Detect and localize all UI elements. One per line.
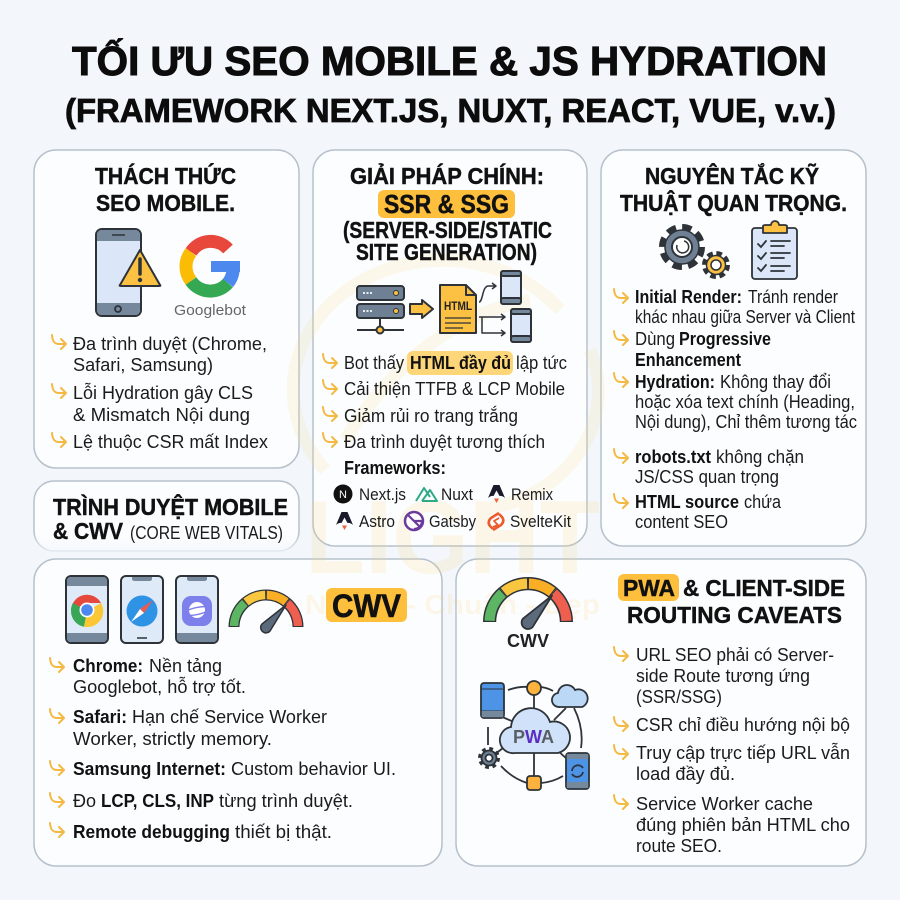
list: PWA: load đầy đủ.: [636, 764, 735, 784]
list: thách thức: Lỗi Hydration gây CLS: [73, 382, 253, 403]
list: PWA: Truy cập trực tiếp URL vẫn: [636, 742, 850, 763]
list: thách thức: & Mismatch Nội dung: [73, 405, 250, 425]
list: nguyên tắc: Progressive: [679, 329, 771, 349]
logo: astro: Astro: [359, 512, 395, 531]
title: TỐI ƯU SEO MOBILE & JS HYDRATION: [72, 38, 827, 84]
logo: nuxt: Nuxt: [441, 485, 473, 504]
heading: nguyên tắc: THUẬT QUAN TRỌNG.: [620, 189, 847, 216]
icon: gauge with CWV label: CWV: [507, 631, 549, 651]
list: browsers: [50, 656, 396, 842]
list: nguyên tắc: Tránh render: [748, 287, 838, 307]
heading: giải pháp: SSR & SSG: [384, 189, 509, 219]
panel fade: trình duyệt card bottom: [30, 534, 303, 554]
list: nguyên tắc: [614, 287, 857, 532]
list: nguyên tắc: Nội dung), Chỉ thêm tương tác: [635, 412, 857, 432]
panel: PWA card: [456, 559, 866, 866]
list: browsers: LCP, CLS, INP: [101, 791, 214, 811]
list: browsers: từng trình duyệt.: [219, 791, 353, 811]
list: browsers: Custom behavior UI.: [231, 759, 396, 779]
list: browsers: Nền tảng: [149, 656, 222, 676]
icon: google G: [186, 241, 240, 291]
heading: PWA: [618, 574, 845, 628]
googlebot label: Googlebot: [174, 302, 247, 319]
title: (FRAMEWORK NEXT.JS, NUXT, REACT, VUE, v.v.): [65, 92, 836, 129]
panel: browsers card: [34, 559, 442, 866]
list: giải pháp: Giảm rủi ro trang trắng: [344, 405, 518, 426]
list: browsers: Chrome:: [73, 656, 143, 676]
heading: thách thức: [95, 162, 236, 216]
list: giải pháp: HTML đầy đủ: [410, 353, 511, 373]
heading: trình duyệt mobile: [53, 493, 288, 544]
logo: nuxt: [416, 485, 473, 504]
list: nguyên tắc: JS/CSS quan trọng: [635, 467, 779, 487]
list: PWA: side Route tương ứng: [636, 666, 810, 686]
list: browsers: Worker, strictly memory.: [73, 729, 272, 749]
icon: safari phone: [121, 576, 163, 643]
icon: PWA network: [480, 681, 589, 790]
logo: sveltekit: [489, 512, 571, 531]
heading: giải pháp: SITE GENERATION): [356, 239, 537, 265]
title: [65, 38, 836, 129]
list: browsers: Googlebot, hỗ trợ tốt.: [73, 676, 246, 697]
list: nguyên tắc: Không thay đổi: [720, 372, 831, 392]
framework logos: [334, 484, 571, 531]
list: browsers: Remote debugging: [73, 822, 230, 842]
list: nguyên tắc: chứa: [744, 492, 782, 512]
heading: giải pháp: (SERVER-SIDE/STATIC: [343, 217, 552, 243]
heading: trình duyệt mobile: TRÌNH DUYỆT MOBILE: [53, 493, 288, 520]
heading: nguyên tắc: NGUYÊN TẮC KỸ: [645, 162, 819, 189]
list: nguyên tắc: Dùng: [635, 329, 675, 349]
heading: trình duyệt mobile: & CWV: [53, 518, 124, 544]
list: giải pháp: Đa trình duyệt tương thích: [344, 432, 545, 452]
heading: PWA: ROUTING CAVEATS: [627, 602, 842, 628]
list: nguyên tắc: Initial Render:: [635, 287, 742, 307]
watermark: [293, 260, 600, 620]
list: giải pháp: [323, 351, 567, 478]
list: thách thức: Safari, Samsung): [73, 355, 213, 375]
list: giải pháp: Cải thiện TTFB & LCP Mobile: [344, 379, 565, 399]
list: browsers: Samsung Internet:: [73, 759, 226, 779]
list: thách thức: Lệ thuộc CSR mất Index: [73, 432, 268, 452]
icon: gauge with CWV label: [490, 584, 566, 651]
panel: giải pháp card: [313, 150, 587, 546]
panel: trình duyệt heading card: [34, 481, 299, 551]
list: PWA: (SSR/SSG): [636, 687, 722, 707]
list: nguyên tắc: robots.txt: [635, 447, 711, 467]
list: PWA: [614, 645, 850, 856]
list: PWA: URL SEO phải có Server-: [636, 645, 834, 665]
list: PWA: route SEO.: [636, 836, 722, 856]
icon: server to html diagram: HTML: [444, 301, 472, 313]
logo: astro: [336, 512, 395, 531]
icon: PWA network: PWA: [513, 727, 554, 747]
list: nguyên tắc: khác nhau giữa Server và Client: [635, 307, 855, 327]
list: nguyên tắc: Hydration:: [635, 372, 715, 392]
list: browsers: Hạn chế Service Worker: [132, 707, 327, 727]
list: browsers: Đo: [73, 791, 96, 811]
icon: clipboard: [752, 221, 797, 279]
heading: giải pháp: [343, 161, 552, 265]
heading: trình duyệt mobile: (CORE WEB VITALS): [130, 523, 283, 543]
list: nguyên tắc: content SEO: [635, 512, 728, 532]
heading: nguyên tắc: [620, 162, 847, 216]
list: browsers: thiết bị thật.: [235, 822, 332, 842]
logo: gatsby: Gatsby: [429, 512, 476, 531]
list: giải pháp: Frameworks:: [344, 458, 446, 478]
icon: chrome phone: [66, 576, 108, 643]
watermark: LIGHT: [305, 480, 600, 596]
heading: thách thức: THÁCH THỨC: [95, 162, 236, 189]
icon: gauge: [234, 595, 298, 633]
list: PWA: Service Worker cache: [636, 794, 813, 814]
list: nguyên tắc: không chặn: [716, 447, 804, 467]
logo: next.js: [334, 484, 406, 504]
icon: phone with warning: [96, 229, 160, 316]
heading: giải pháp: GIẢI PHÁP CHÍNH:: [350, 161, 544, 189]
list: thách thức: [52, 334, 268, 452]
panel: thách thức card: [34, 150, 299, 468]
panel: nguyên tắc card: [601, 150, 866, 546]
logo: remix: Remix: [511, 485, 553, 504]
heading: thách thức: SEO MOBILE.: [96, 190, 235, 216]
logo: next.js: N: [339, 489, 347, 501]
heading: PWA: & CLIENT-SIDE: [683, 575, 845, 601]
logo: next.js: Next.js: [359, 485, 406, 504]
list: giải pháp: lập tức: [516, 353, 567, 373]
watermark: Nhanh - Chuẩn - Đẹp: [305, 589, 600, 620]
list: PWA: đúng phiên bản HTML cho: [636, 815, 850, 835]
list: nguyên tắc: Enhancement: [635, 350, 741, 370]
list: nguyên tắc: hoặc xóa text chính (Heading,: [635, 392, 855, 412]
list: nguyên tắc: HTML source: [635, 492, 739, 512]
list: PWA: CSR chỉ điều hướng nội bộ: [636, 715, 850, 735]
icon: server to html diagram: [357, 271, 531, 342]
list: browsers: Safari:: [73, 707, 127, 727]
list: thách thức: Đa trình duyệt (Chrome,: [73, 334, 267, 354]
badge: CWV: CWV: [332, 588, 402, 624]
list: giải pháp: Bot thấy: [344, 353, 404, 373]
heading: PWA: PWA: [623, 575, 675, 601]
icon: gears: [664, 229, 726, 276]
logo: gatsby: [405, 512, 476, 531]
logo: sveltekit: SvelteKit: [510, 512, 571, 531]
icon: samsung phone: [176, 576, 218, 643]
logo: remix: [488, 485, 553, 504]
